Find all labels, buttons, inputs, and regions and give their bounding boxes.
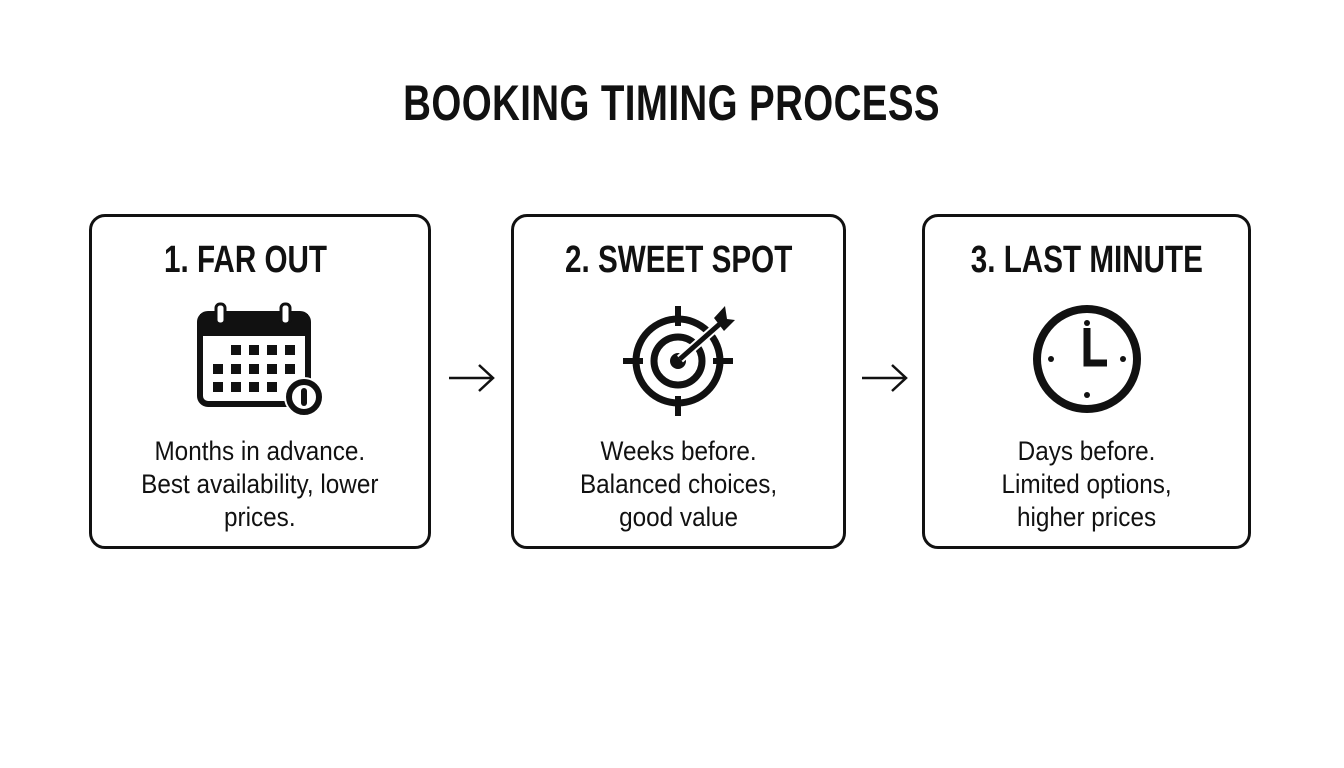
text: sweet spot description: Balanced choices, <box>580 469 777 499</box>
panel: far out <box>89 214 431 549</box>
icon: target <box>623 306 735 416</box>
text: last minute description: higher prices <box>1017 502 1156 532</box>
text: sweet spot description <box>580 436 777 532</box>
panel: sweet spot <box>511 214 846 549</box>
icon: clock <box>1033 305 1141 413</box>
arrow 1 <box>449 364 495 392</box>
text: far out description <box>141 436 379 532</box>
arrow 2 <box>862 364 908 392</box>
heading: last minute: 3. LAST MINUTE <box>970 239 1203 281</box>
text: sweet spot description: Weeks before. <box>600 436 757 466</box>
text: far out description: Best availability, lower <box>141 469 379 499</box>
heading: far out: 1. FAR OUT <box>164 239 328 281</box>
panel: last minute <box>922 214 1251 549</box>
icon: calendar <box>197 302 322 415</box>
text: last minute description: Days before. <box>1018 436 1155 466</box>
text: sweet spot description: good value <box>619 502 738 532</box>
text: last minute description: Limited options, <box>1001 469 1172 499</box>
text: far out description: prices. <box>224 502 296 532</box>
text: last minute description <box>1001 436 1172 532</box>
text: far out description: Months in advance. <box>155 436 365 466</box>
title: BOOKING TIMING PROCESS <box>404 75 940 131</box>
heading: sweet spot: 2. SWEET SPOT <box>565 239 792 281</box>
